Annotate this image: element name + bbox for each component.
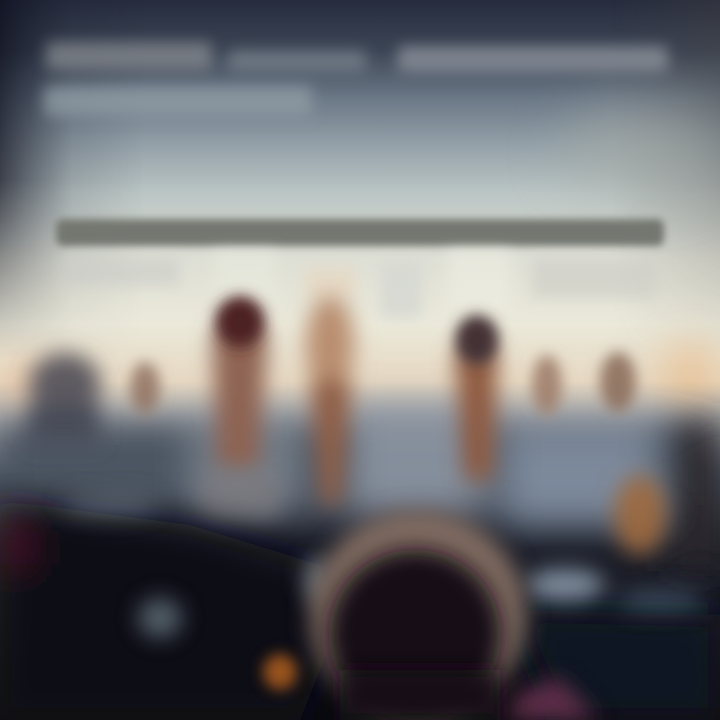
title: illegible blurred heading <box>44 42 668 116</box>
background figure small left <box>130 362 160 414</box>
foreground crowd shadow <box>0 500 720 720</box>
foreground highlights <box>62 494 705 638</box>
figure centre-right <box>454 315 499 480</box>
distant skyline haze <box>0 405 720 570</box>
background figures right <box>532 352 636 415</box>
figure centre-left <box>200 296 280 520</box>
background figure left <box>28 353 101 445</box>
banner hanging cards <box>62 250 657 318</box>
orange glow right <box>614 475 666 555</box>
figure centre tan <box>306 295 354 505</box>
banner bar <box>56 219 664 246</box>
foreground person: back of head <box>263 510 598 720</box>
